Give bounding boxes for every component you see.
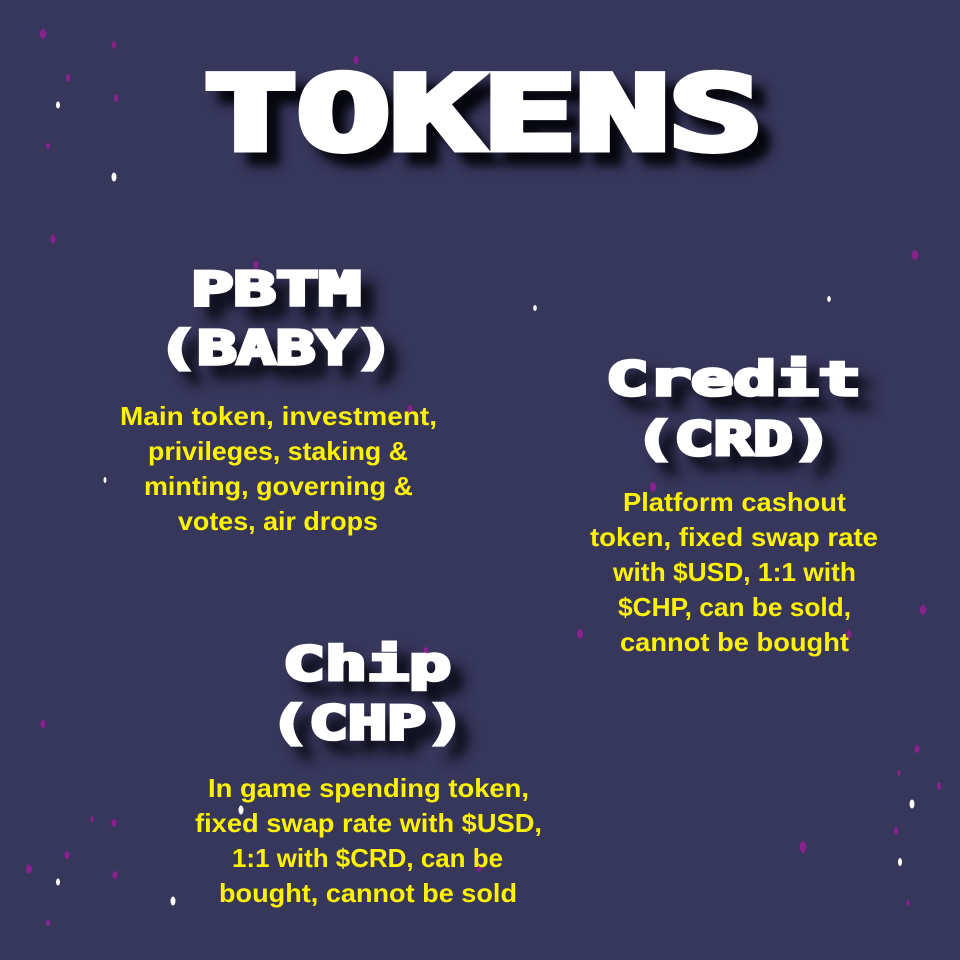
text block: Credit description: token, fixed swap rate	[590, 522, 878, 552]
text block: Credit description: cannot be bought	[620, 627, 849, 657]
heading: Chip (CHP)	[270, 637, 465, 750]
heading: PBTM (BABY): PBTM	[191, 262, 361, 316]
text block: PBTM description	[120, 401, 437, 536]
heading: PBTM (BABY)	[158, 262, 394, 375]
text block: Chip description: bought, cannot be sold	[219, 878, 517, 908]
heading: Chip (CHP): (CHP)	[270, 696, 465, 750]
text block: Credit description	[590, 487, 878, 657]
text block: Credit description: $CHP, can be sold,	[618, 592, 851, 622]
text block: Chip description	[195, 773, 542, 908]
text block: PBTM description: minting, governing &	[144, 471, 413, 501]
text block: Credit description: Platform cashout	[623, 487, 846, 517]
heading: PBTM (BABY): (BABY)	[158, 321, 394, 375]
heading: Credit (CRD)	[606, 352, 861, 466]
heading: Credit (CRD): (CRD)	[635, 412, 832, 466]
text block: Chip description: fixed swap rate with $USD,	[195, 808, 542, 838]
heading: Chip (CHP): Chip	[283, 637, 451, 691]
text block: Credit description: with $USD, 1:1 with	[612, 557, 856, 587]
panel: Credit token	[590, 352, 878, 657]
text block: PBTM description: Main token, investment,	[120, 401, 437, 431]
title: TOKENS	[204, 55, 762, 174]
text block: PBTM description: votes, air drops	[178, 506, 378, 536]
text block: Chip description: In game spending token,	[208, 773, 529, 803]
panel: PBTM token	[120, 262, 437, 536]
panel: Chip token	[195, 637, 542, 908]
text block: PBTM description: privileges, staking &	[148, 436, 408, 466]
text block: Chip description: 1:1 with $CRD, can be	[232, 843, 503, 873]
heading: Credit (CRD): Credit	[606, 352, 861, 406]
